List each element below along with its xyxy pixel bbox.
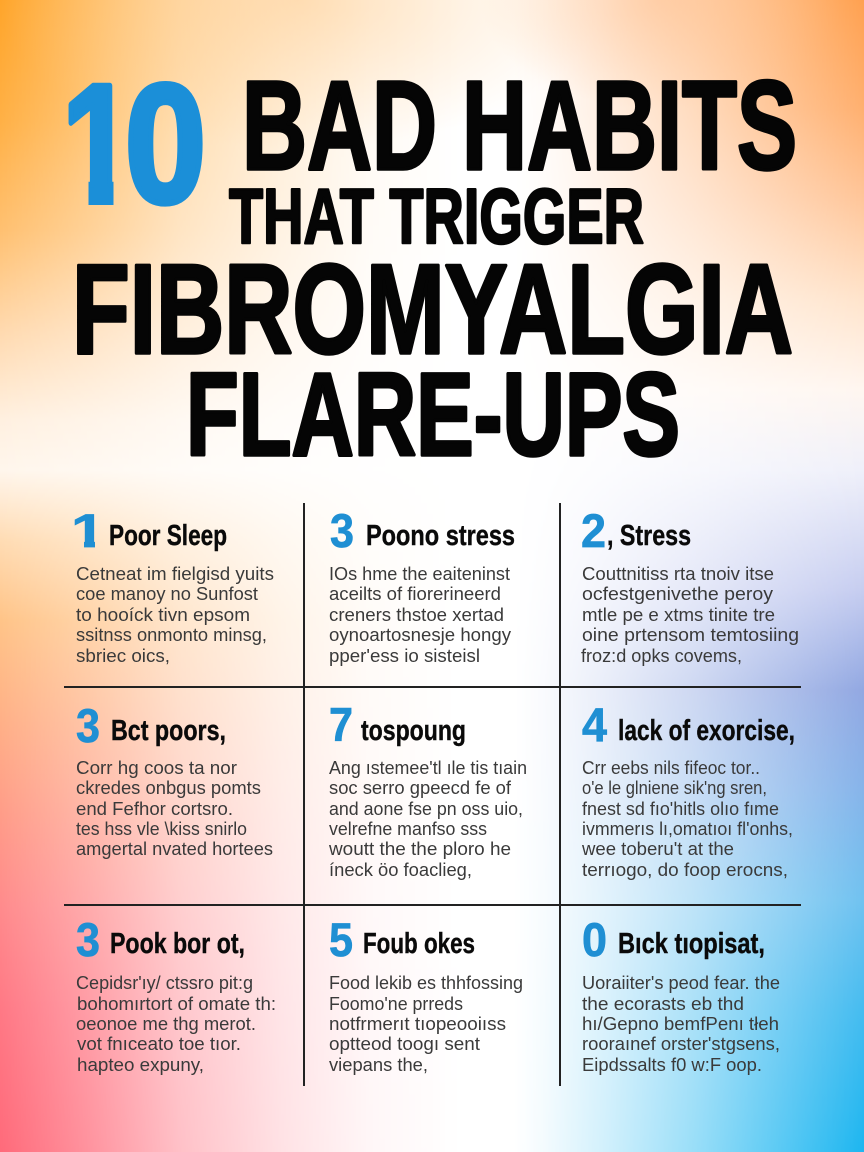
panel: tospoung [328, 698, 527, 880]
heading: Bct poors, [111, 715, 226, 747]
panel: pook bor ot [76, 913, 276, 1075]
body text [328, 758, 527, 880]
body text [581, 564, 799, 666]
heading: Poor Sleep [109, 520, 227, 552]
number: 7 [329, 698, 353, 751]
title [68, 78, 795, 458]
body text: notfrmerıt tıopeooiıss [329, 1014, 506, 1034]
panel: lack of exercise [581, 698, 795, 880]
infographic canvas [64, 78, 801, 1086]
number: 1 [71, 504, 105, 557]
body text: aceilts of fiorerineerd [329, 584, 501, 604]
body text: fnest sd fıo'hitls olıo fıme [582, 799, 779, 819]
number: 5 [329, 913, 353, 966]
body text: Cepidsr'ıy/ ctssro pit:g [76, 973, 253, 993]
body text: mtle pe e xtms tinite tre [582, 605, 775, 625]
body text: Foomo'ne prreds [329, 994, 463, 1014]
body text [76, 973, 276, 1075]
panel: bick tiopisat [582, 913, 780, 1075]
body text: froz:d opks covems, [581, 646, 742, 666]
big number 10: 0 [125, 49, 206, 238]
number: 3 [76, 699, 100, 752]
big number 10 [68, 81, 203, 207]
body text: oeonoe me thg merot. [76, 1014, 256, 1034]
body text: ivmmerıs lı,omatıoı fl'onhs, [582, 819, 793, 839]
big number 10: 1 [62, 49, 134, 238]
body text: to hooíck tivn epsom [76, 605, 250, 625]
body text: pper'ess io sisteisl [329, 646, 480, 666]
number: 0 [582, 913, 607, 966]
body text: viepans the, [329, 1055, 428, 1075]
heading: Foub okes [363, 928, 475, 960]
body text: Couttnitiss rta tnoiv itse [582, 564, 774, 584]
body text: Eipdssalts f0 w:F oop. [582, 1055, 762, 1075]
body text: creners thstoe xertad [329, 605, 504, 625]
body text: ssitnss onmonto minsg, [76, 625, 267, 645]
body text: Crr eebs nils fifeoc tor.. [582, 758, 760, 778]
heading: Bıck tıopisat, [618, 928, 765, 960]
panel: stress [581, 504, 799, 666]
panel: bct poors [76, 699, 273, 859]
panel: poor sleep [71, 504, 274, 666]
body text: íneck öo foaclieg, [329, 860, 472, 880]
body text: ckredes onbgus pomts [76, 778, 261, 798]
heading: tospoung [361, 715, 466, 747]
panel: poono stress [329, 504, 515, 666]
title line: flare-ups: FLARE-UPS [186, 349, 680, 481]
body text: ocfestgenivethe peroy [582, 584, 773, 604]
number: 3 [76, 913, 100, 966]
body text: Corr hg coos ta nor [76, 758, 237, 778]
body text: soc serro gpeecd fe of [329, 778, 512, 798]
body text: Food lekib es thhfossing [329, 973, 523, 993]
body text [76, 564, 274, 666]
title line: that trigger: THAT TRIGGER [229, 172, 644, 260]
body text: terrıogo, do foop erocns, [582, 860, 788, 880]
body text: optteod toogı sent [329, 1034, 480, 1054]
body text: velrefne manfso sss [329, 819, 487, 839]
grid lines [64, 503, 801, 1086]
body text: hapteo expuny, [77, 1055, 204, 1075]
panel: foub okes [329, 913, 523, 1075]
body text: wee toberu't at the [581, 839, 734, 859]
body text: and aone fse pn oss uio, [329, 799, 523, 819]
body text: the ecorasts eb thd [582, 994, 744, 1014]
heading: , Stress [607, 520, 691, 552]
body text [329, 564, 511, 666]
body text: IOs hme the eaiteninst [329, 564, 510, 584]
body text: Cetneat im fielgisd yuits [76, 564, 274, 584]
heading: Poono stress [366, 520, 515, 552]
body text: o'e le glniene sik'ng sren, [582, 778, 767, 798]
heading: lack of exorcise, [618, 715, 795, 747]
heading: Pook bor ot, [110, 928, 245, 960]
body text [581, 758, 793, 880]
body text: bohomırtort of omate th: [77, 994, 276, 1014]
body text: rooraınef orster'stgsens, [582, 1034, 780, 1054]
body text: amgertal nvated hortees [76, 839, 273, 859]
body text: oine prtensom temtosiing [582, 625, 799, 645]
body text [582, 973, 780, 1075]
number: 3 [330, 504, 354, 557]
body text [76, 758, 273, 859]
body text: Ang ıstemee'tl ıle tis tıain [329, 758, 527, 778]
number: 2 [581, 504, 606, 557]
body text: woutt the the ploro he [328, 839, 511, 859]
body text: oynoartosnesje hongy [329, 625, 511, 645]
number: 4 [582, 698, 607, 751]
body text [329, 973, 523, 1075]
body text: coe manoy no Sunfost [76, 584, 258, 604]
body text: vot fnıceato toe tıor. [77, 1034, 241, 1054]
body text: tes hss vle \kiss snirlo [76, 819, 247, 839]
body text: Uoraiiter's peod fear. the [582, 973, 780, 993]
body text: end Fefhor cortsro. [76, 799, 233, 819]
body text: sbriec oics, [76, 646, 170, 666]
body text: hı/Gepno bemfPenı tłeh [582, 1014, 779, 1034]
